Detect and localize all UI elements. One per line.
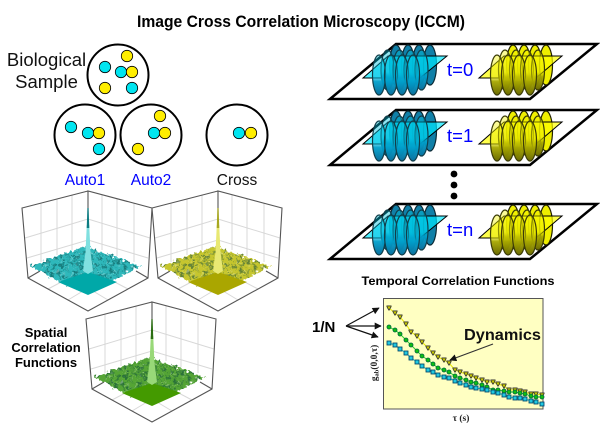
image plane t=0: [330, 44, 597, 99]
circle: cross: [206, 104, 268, 166]
3d plot: auto1 cyan: [22, 191, 152, 311]
chart y axis label: ab: [374, 369, 380, 377]
chart: temporal correlation curves: [384, 298, 543, 409]
arrows from 1/N to curves: [346, 308, 381, 337]
curve: auto1 cyan: [389, 343, 542, 404]
spatial correlation functions label: Correlation: [11, 340, 81, 355]
ellipsis dots: [451, 171, 457, 199]
image plane t=n: [330, 204, 597, 259]
image plane t=1: t=1: [447, 125, 473, 146]
dynamics arrow: [450, 344, 493, 360]
3d plot: cross green: [86, 302, 216, 422]
title: Image Cross Correlation Microscopy (ICCM): [137, 12, 465, 31]
1/N label: 1/N: [312, 319, 335, 336]
biological sample label: [7, 49, 86, 92]
curve: auto2 yellow: [389, 308, 542, 395]
circle: auto1: [54, 104, 116, 166]
image plane t=n: t=n: [447, 219, 473, 240]
curve: cross green: [389, 327, 542, 397]
chart y axis label: g: [370, 377, 380, 381]
chart y axis label: (0,0,τ): [369, 345, 380, 370]
labels: auto1, auto2, cross: [65, 172, 257, 189]
circle: auto2: [120, 104, 182, 166]
spatial correlation functions label: Spatial: [25, 325, 67, 340]
temporal correlation functions heading: Temporal Correlation Functions: [362, 274, 555, 288]
biological sample label: Biological: [7, 49, 86, 70]
spatial correlation functions label: Functions: [15, 355, 77, 370]
3d plot: auto2 yellow: [152, 191, 282, 311]
labels: auto1, auto2, cross: Auto2: [131, 172, 171, 189]
labels: auto1, auto2, cross: Cross: [217, 172, 257, 189]
dynamics label: Dynamics: [464, 327, 541, 344]
labels: auto1, auto2, cross: Auto1: [65, 172, 105, 189]
image plane t=0: t=0: [447, 59, 473, 80]
image plane t=1: [330, 110, 597, 165]
spatial correlation functions label: [11, 325, 81, 370]
circle: biological sample: [88, 44, 148, 106]
chart x axis label: τ (s): [453, 413, 469, 424]
biological sample label: Sample: [15, 71, 78, 92]
